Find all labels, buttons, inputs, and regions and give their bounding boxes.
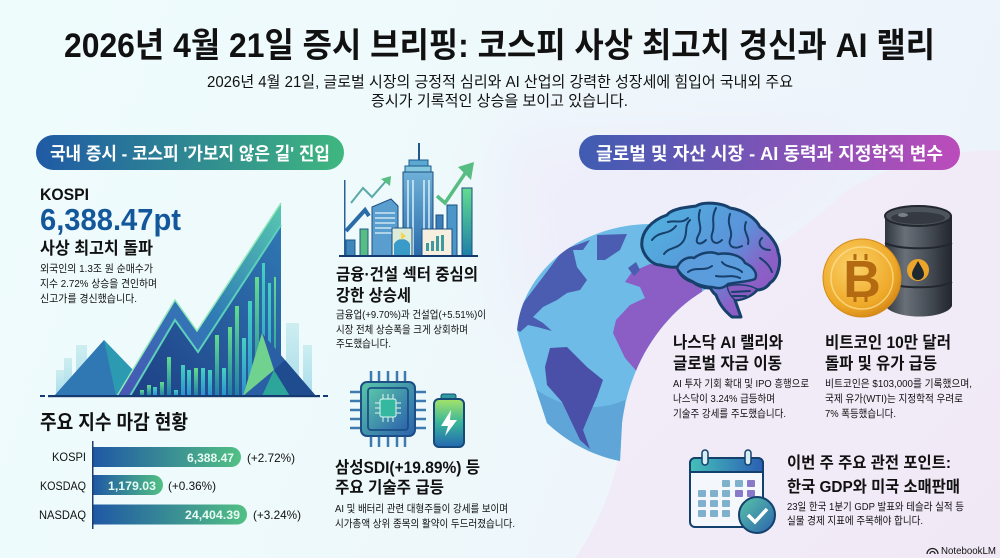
bar chart: index closings — [39, 441, 301, 529]
bar: KOSDAQ: (+0.36%) — [168, 479, 216, 493]
NotebookLM logo: NotebookLM — [941, 545, 996, 557]
text block: Nasdaq AI rally — [673, 333, 809, 420]
text block: key points this week — [787, 454, 964, 527]
panel heading: global market pill — [579, 135, 960, 170]
bar: KOSPI: 6,388.47 — [187, 451, 234, 465]
icon: oil barrel — [885, 206, 952, 316]
icon: globe — [510, 220, 785, 465]
KOSPI callout — [40, 185, 181, 305]
KOSPI callout: 6,388.47pt — [40, 202, 181, 237]
bar: KOSDAQ — [40, 475, 216, 495]
text block: Samsung SDI: 주요 기술주 급등 — [335, 478, 444, 497]
KOSPI callout: 신고가를 경신했습니다. — [40, 292, 137, 305]
icon: brain — [642, 203, 780, 317]
bar: NASDAQ: NASDAQ — [39, 508, 86, 522]
text block: key points this week: 23일 한국 1분기 GDP 발표와 테슬라 실적 등 — [787, 500, 964, 513]
icon: calendar with check mark — [690, 450, 775, 533]
text block: finance and construction — [336, 265, 486, 350]
text block: finance and construction: 시장 전체 상승폭을 크게 상회하며 — [336, 323, 468, 336]
KOSPI callout: 사상 최고치 돌파 — [40, 239, 153, 258]
subtitle — [207, 73, 793, 110]
KOSPI callout: 외국인의 1.3조 원 순매수가 — [40, 263, 153, 275]
text block: bitcoin and oil: 비트코인 10만 달러 — [825, 333, 951, 352]
panel heading: domestic market pill — [36, 135, 344, 170]
text block: bitcoin and oil — [825, 333, 972, 420]
bar: KOSDAQ: KOSDAQ — [40, 479, 86, 493]
subtitle: 2026년 4월 21일, 글로벌 시장의 긍정적 심리와 AI 산업의 강력한 성장세에 힘입어 국내외 주요 — [207, 73, 793, 91]
text block: Nasdaq AI rally: AI 투자 기회 확대 및 IPO 흥행으로 — [673, 377, 809, 390]
bar: KOSPI: KOSPI — [52, 450, 86, 464]
text block: key points this week: 실물 경제 지표에 주목해야 합니다. — [787, 514, 923, 527]
icon: bitcoin coin — [823, 239, 901, 317]
text block: Samsung SDI: 시가총액 상위 종목의 활약이 두드러졌습니다. — [335, 517, 515, 530]
text block: bitcoin and oil: 돌파 및 유가 급등 — [825, 354, 937, 373]
panel heading: domestic market pill: 국내 증시 - 코스피 '가보지 않은 길' 진입 — [50, 144, 330, 164]
text block: key points this week: 이번 주 주요 관전 포인트: — [787, 454, 951, 472]
panel heading: global market pill: 글로벌 및 자산 시장 - AI 동력과 지정학적 변수 — [596, 144, 943, 164]
text block: finance and construction: 금융·건설 섹터 중심의 — [336, 265, 478, 284]
bar: NASDAQ — [39, 504, 301, 524]
text block: Nasdaq AI rally: 나스닥이 3.24% 급등하며 — [673, 392, 775, 405]
bar: NASDAQ: 24,404.39 — [185, 508, 240, 522]
text block: Nasdaq AI rally: 글로벌 자금 이동 — [673, 354, 782, 373]
text block: Samsung SDI: 삼성SDI(+19.89%) 등 — [335, 458, 480, 477]
index table heading: 주요 지수 마감 현황 — [40, 411, 188, 434]
text block: bitcoin and oil: 7% 폭등했습니다. — [825, 408, 896, 420]
icon: city buildings with rising arrows — [339, 143, 478, 257]
text block: bitcoin and oil: 국제 유가(WTI)는 지정학적 우려로 — [825, 393, 963, 405]
title: 2026년 4월 21일 증시 브리핑: 코스피 사상 최고치 경신과 AI 랠리 — [64, 27, 935, 65]
text block: Samsung SDI — [335, 458, 515, 530]
bar: KOSPI — [52, 447, 295, 467]
bar: NASDAQ: (+3.24%) — [253, 508, 301, 522]
text block: Nasdaq AI rally: 나스닥 AI 랠리와 — [673, 333, 783, 352]
KOSPI callout: KOSPI — [40, 185, 89, 204]
text block: finance and construction: 주도했습니다. — [336, 338, 391, 350]
text block: Samsung SDI: AI 및 배터리 관련 대형주들이 강세를 보이며 — [335, 503, 508, 515]
subtitle: 증시가 기록적인 상승을 보이고 있습니다. — [371, 92, 628, 110]
icon: chip and battery — [350, 371, 464, 447]
text block: key points this week: 한국 GDP와 미국 소매판매 — [787, 478, 960, 496]
text block: finance and construction: 강한 상승세 — [336, 286, 411, 305]
text block: bitcoin and oil: 비트코인은 $103,000를 기록했으며, — [825, 378, 972, 390]
bar: KOSPI: (+2.72%) — [247, 451, 295, 465]
text block: finance and construction: 금융업(+9.70%)과 건설업(+5.51%)이 — [336, 308, 486, 321]
KOSPI callout: 지수 2.72% 상승을 견인하며 — [40, 277, 157, 290]
bar: KOSDAQ: 1,179.03 — [108, 479, 156, 493]
icon: bitcoin coin: B — [843, 251, 881, 309]
text block: Nasdaq AI rally: 기술주 강세를 주도했습니다. — [673, 408, 786, 420]
mountain chart illustration — [40, 203, 328, 397]
